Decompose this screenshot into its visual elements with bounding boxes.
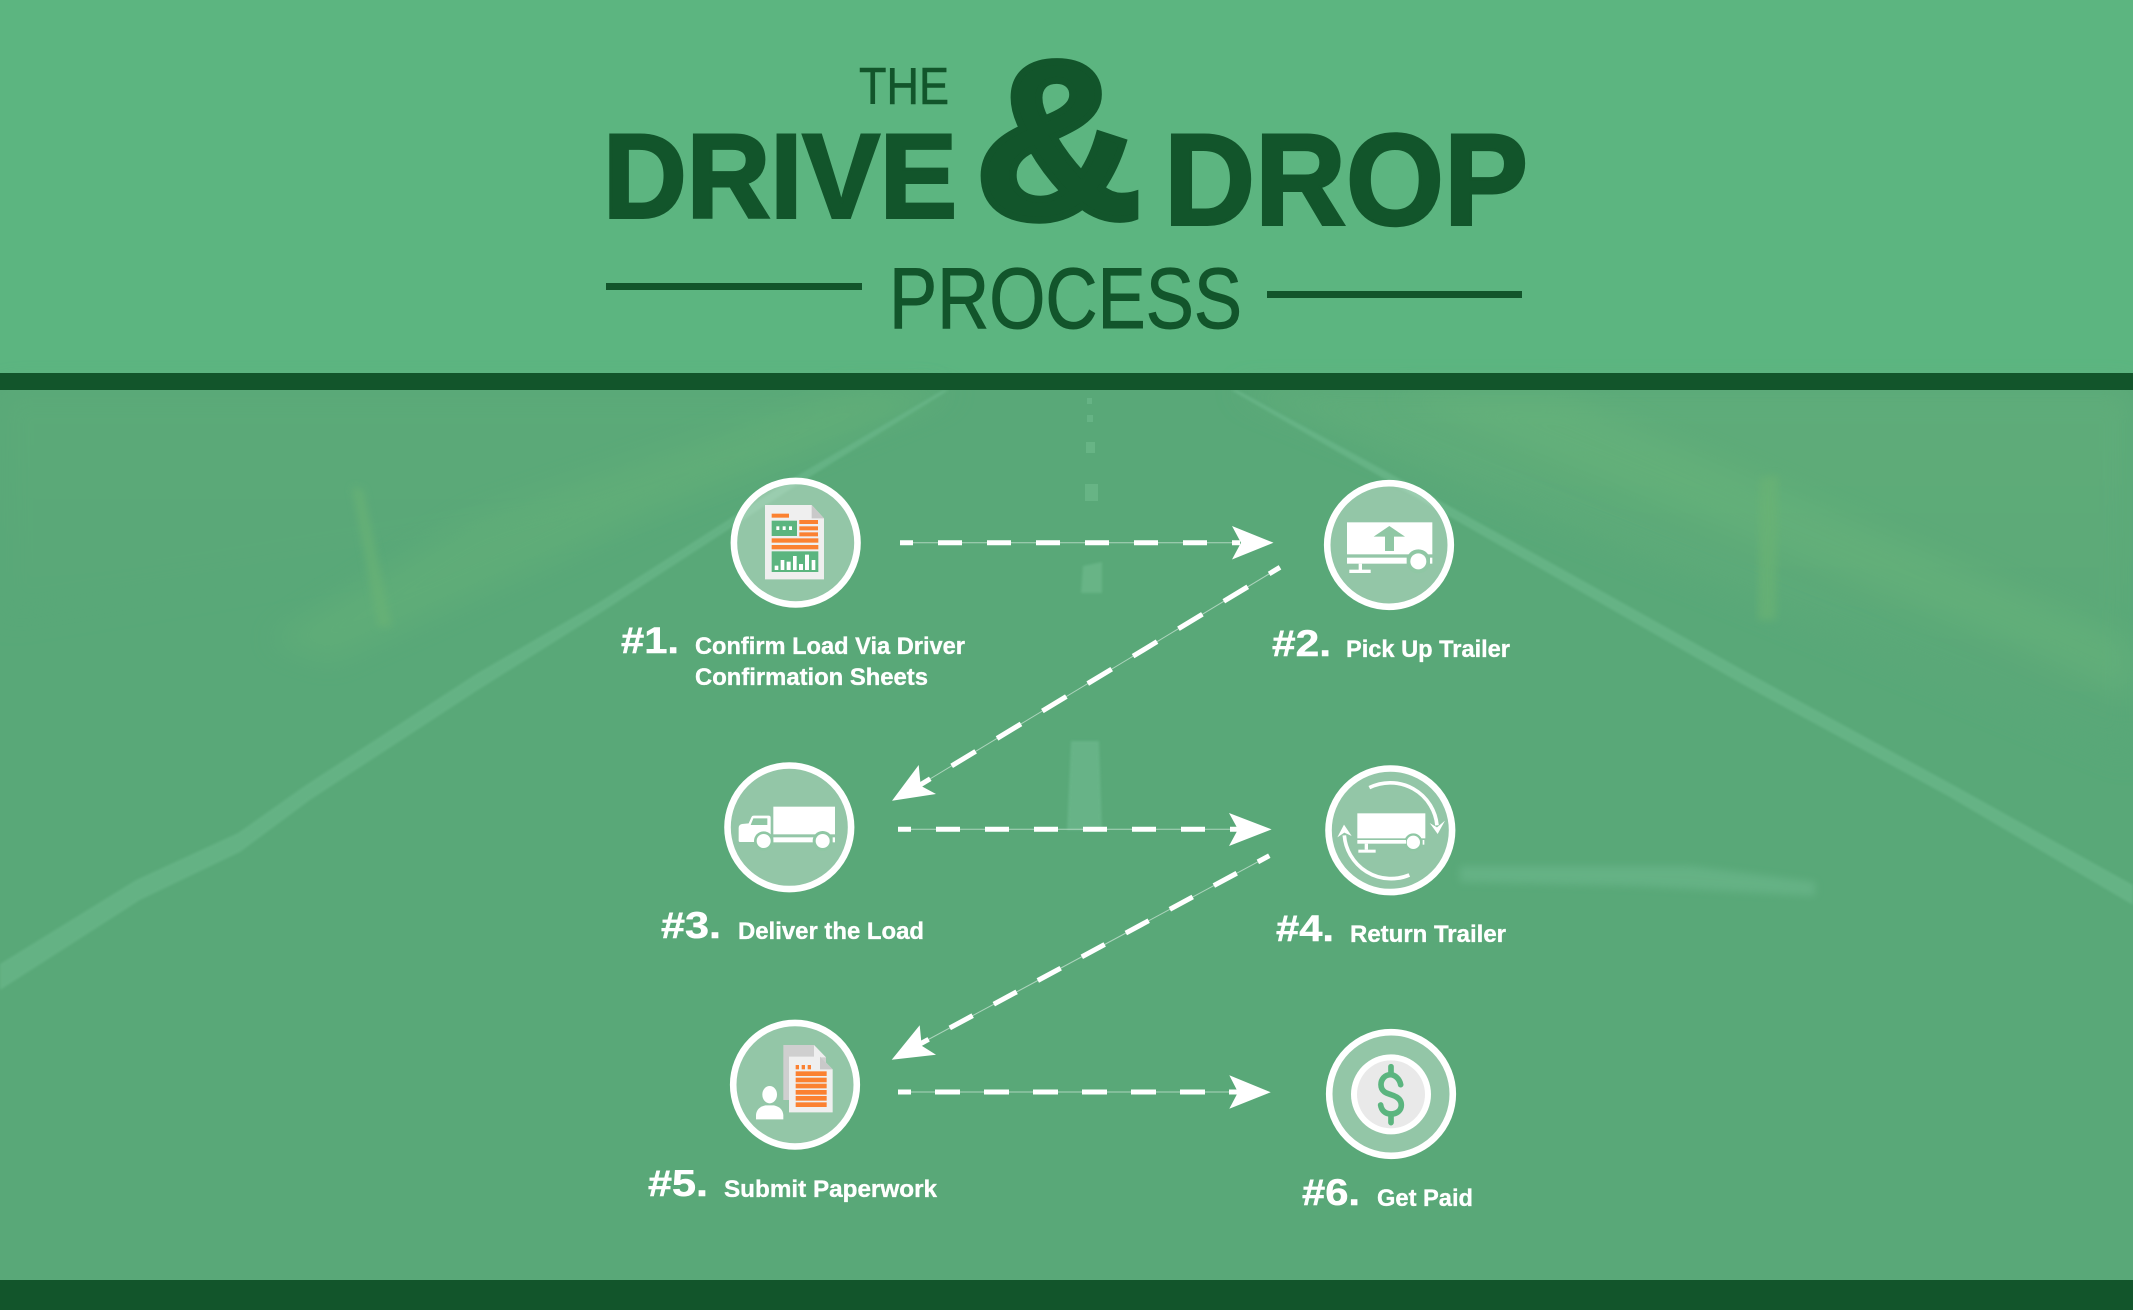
step 2 circle — [1327, 483, 1451, 607]
step 5 number: #5. — [648, 1162, 708, 1204]
arrow: step 1 to step 2 — [900, 526, 1274, 560]
step 4 number: #4. — [1276, 907, 1334, 949]
step 6 number: #6. — [1302, 1171, 1360, 1213]
step 3 number: #3. — [661, 904, 721, 946]
title word: PROCESS: PROCESS — [889, 251, 1242, 347]
step 3 label: Deliver the Load — [738, 918, 924, 945]
step 4 label: Return Trailer — [1350, 921, 1506, 948]
title — [603, 13, 1528, 347]
step 1 label: Confirm Load Via Driver — [695, 633, 965, 660]
title word: DRIVE: DRIVE — [603, 110, 957, 244]
road background photo — [0, 390, 2133, 1280]
arrow: step 2 to step 3 — [892, 567, 1280, 801]
icon: person with documents — [756, 1045, 833, 1119]
step 1 circle — [734, 481, 858, 604]
arrow: step 3 to step 4 — [898, 813, 1272, 846]
arrow: step 4 to step 5 — [892, 856, 1269, 1060]
step 5 — [648, 1023, 938, 1204]
icon: document with chart — [765, 505, 824, 579]
step 1 number: #1. — [621, 619, 679, 661]
step 1 — [621, 481, 965, 691]
bottom bar — [0, 1280, 2133, 1310]
step 2 label: Pick Up Trailer — [1346, 636, 1510, 663]
step 6 — [1302, 1032, 1473, 1213]
step 4 — [1276, 768, 1506, 949]
arrow: step 5 to step 6 — [898, 1075, 1271, 1109]
title ampersand: & — [974, 13, 1142, 266]
step 6 circle — [1329, 1032, 1453, 1156]
header band — [0, 0, 2133, 373]
icon: delivery truck — [739, 807, 835, 851]
step 6 label: Get Paid — [1377, 1185, 1473, 1212]
icon: trailer with up arrow — [1347, 522, 1432, 573]
title rule left — [606, 283, 862, 290]
step 1 label line 2: Confirmation Sheets — [695, 664, 928, 691]
title word: THE: THE — [859, 58, 949, 116]
step 5 circle — [733, 1023, 857, 1146]
title rule right — [1267, 291, 1522, 298]
step 5 label: Submit Paperwork — [724, 1176, 938, 1203]
top divider bar — [0, 373, 2133, 390]
icon: trailer with return arrows — [1337, 783, 1445, 879]
step 2 number: #2. — [1272, 622, 1331, 664]
title word: DROP: DROP — [1164, 106, 1528, 252]
step 2 — [1272, 483, 1510, 664]
step 3 — [661, 766, 924, 946]
icon: dollar coin — [1351, 1054, 1431, 1134]
step 4 circle — [1328, 768, 1452, 892]
step 3 circle — [728, 766, 851, 889]
